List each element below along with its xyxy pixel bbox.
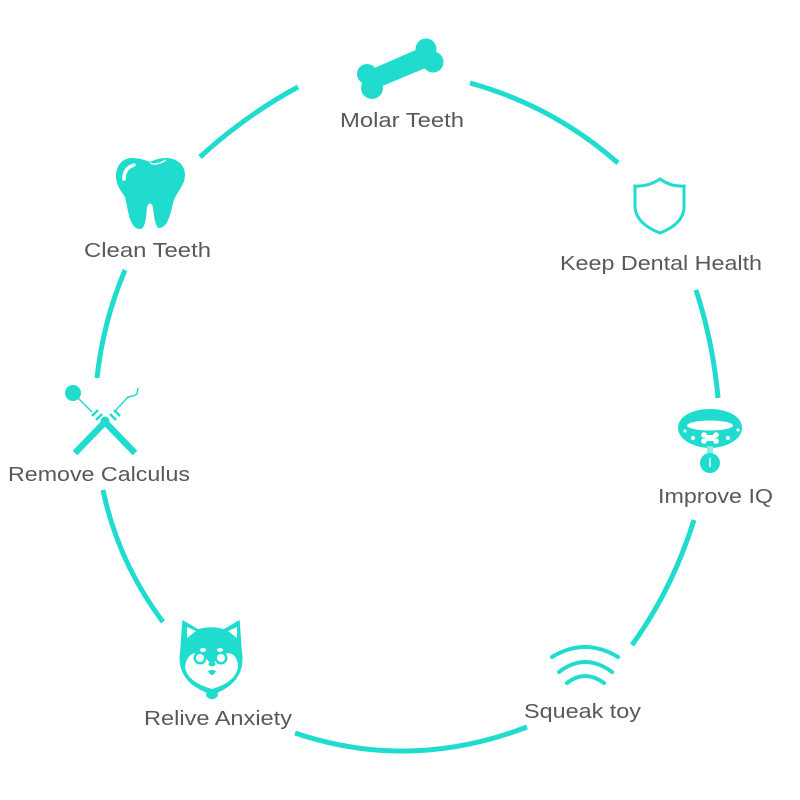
- label: Squeak toy: Squeak toy: [524, 701, 641, 723]
- icon: shield: [635, 179, 684, 233]
- Keep Dental Health item: [560, 179, 762, 275]
- icon: dental tools: [65, 385, 138, 453]
- Clean Teeth item: [84, 158, 211, 262]
- label: Keep Dental Health: Keep Dental Health: [560, 253, 762, 275]
- label: Remove Calculus: Remove Calculus: [8, 464, 190, 486]
- icon: sound waves: [552, 647, 618, 683]
- Relive Anxiety item: [144, 621, 292, 730]
- Molar Teeth item: [340, 38, 464, 132]
- icon: bone: [357, 38, 444, 99]
- Squeak toy item: [524, 647, 641, 723]
- icon: dog collar with tag: [678, 409, 742, 473]
- label: Improve IQ: Improve IQ: [658, 486, 773, 508]
- label: Molar Teeth: Molar Teeth: [340, 110, 464, 132]
- icon: tooth: [116, 158, 185, 229]
- label: Relive Anxiety: Relive Anxiety: [144, 708, 292, 730]
- label: Clean Teeth: Clean Teeth: [84, 240, 211, 262]
- circular ring segments: [97, 83, 718, 751]
- Remove Calculus item: [8, 385, 190, 486]
- icon: shiba dog face: [180, 621, 242, 698]
- Improve IQ item: [658, 409, 773, 508]
